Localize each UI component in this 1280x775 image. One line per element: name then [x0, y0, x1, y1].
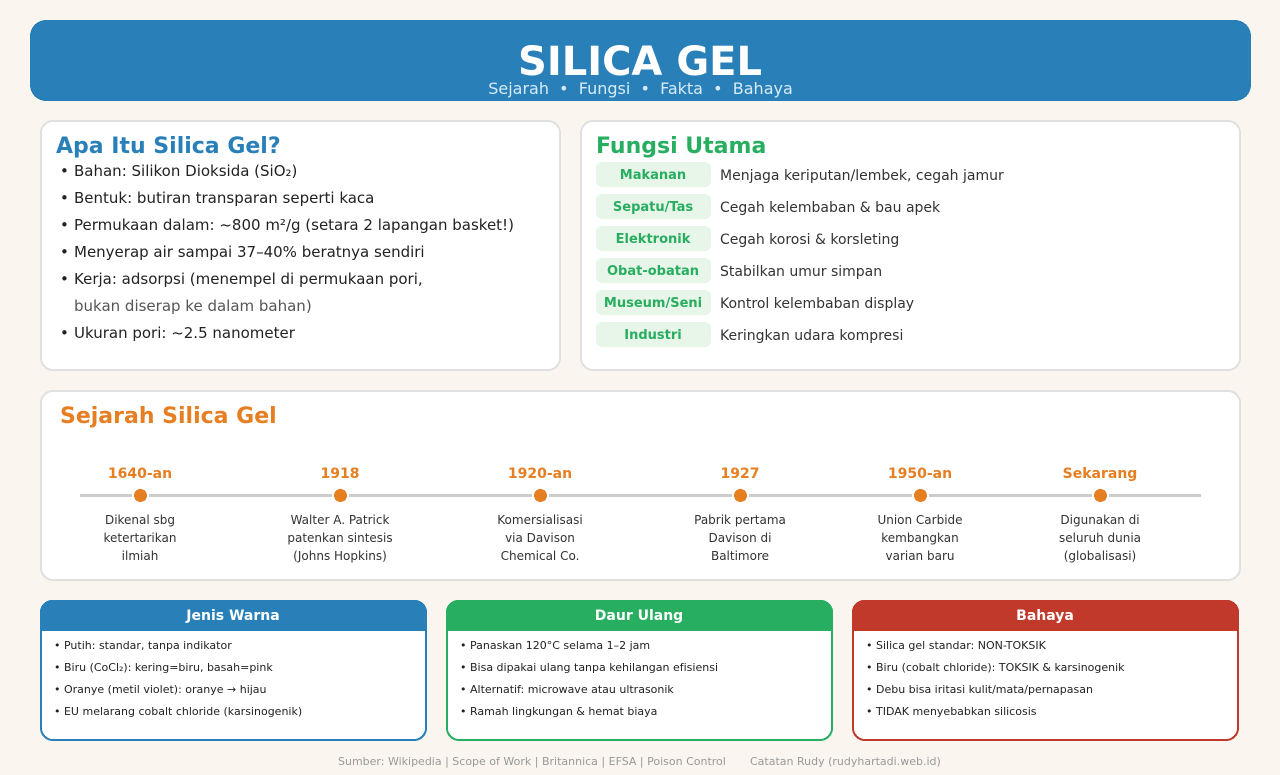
heading: Fungsi Utama: Fungsi Utama — [596, 134, 766, 159]
list: Daur Ulang: • Alternatif: microwave atau ultrasonik — [460, 683, 674, 696]
list: Bahaya: • Biru (cobalt chloride): TOKSIK & karsinogenik — [866, 661, 1125, 674]
milestone: 1918: (Johns Hopkins) — [293, 549, 387, 563]
list: Bahaya: • TIDAK menyebabkan silicosis — [866, 705, 1037, 718]
subtitle: Sejarah • Fungsi • Fakta • Bahaya — [488, 79, 793, 98]
heading: Apa Itu Silica Gel: Apa Itu Silica Gel? — [56, 134, 281, 159]
milestone: Sekarang: (globalisasi) — [1064, 549, 1136, 563]
card header: Jenis Warna — [40, 600, 427, 631]
row: Sepatu/Tas: Cegah kelembaban & bau apek — [720, 200, 941, 216]
card: Daur Ulang — [446, 600, 833, 740]
milestone: Sekarang: Digunakan di — [1060, 513, 1140, 527]
milestone: 1918 — [287, 466, 393, 563]
bullet list: Bahan: Silikon Dioksida (SiO₂) — [74, 162, 297, 180]
milestone: 1927: Pabrik pertama — [694, 513, 786, 527]
milestone: 1950-an: kembangkan — [881, 531, 959, 545]
bullet list: Menyerap air sampai 37–40% beratnya sendiri — [74, 243, 425, 261]
row: Sepatu/Tas — [596, 194, 941, 219]
bullet list: Kerja: adsorpsi (menempel di permukaan pori, — [74, 270, 423, 288]
list: Jenis Warna — [54, 639, 302, 718]
bullet list: • — [60, 243, 69, 261]
row: Industri: Keringkan udara kompresi — [720, 328, 903, 344]
milestone: 1640-an: Dikenal sbg — [105, 513, 175, 527]
row: Museum/Seni: Museum/Seni — [604, 296, 702, 311]
row: Industri: Industri — [624, 328, 682, 343]
row: Museum/Seni: Kontrol kelembaban display — [720, 296, 914, 312]
list: Daur Ulang: • Panaskan 120°C selama 1–2 jam — [460, 639, 650, 652]
list: Daur Ulang: • Bisa dipakai ulang tanpa kehilangan efisiensi — [460, 661, 718, 674]
milestone: 1950-an: Union Carbide — [877, 513, 963, 527]
list: Bahaya: • Silica gel standar: NON-TOKSIK — [866, 639, 1047, 652]
card: Jenis Warna — [40, 600, 427, 740]
row: Sepatu/Tas: Sepatu/Tas — [613, 200, 693, 215]
list: Daur Ulang: • Ramah lingkungan & hemat biaya — [460, 705, 657, 718]
footer sources: Sumber: Wikipedia | Scope of Work | Britannica | EFSA | Poison Control — [338, 755, 726, 768]
row: Obat-obatan: Obat-obatan — [607, 264, 699, 279]
milestone: 1927 — [694, 466, 786, 563]
card header: Daur Ulang — [446, 600, 833, 631]
milestone: 1918: patenkan sintesis — [287, 531, 393, 545]
list: Bahaya — [866, 639, 1125, 718]
row: Museum/Seni — [596, 290, 914, 315]
row: Makanan: Makanan — [620, 168, 686, 183]
milestone: 1920-an — [497, 466, 583, 563]
milestone: 1640-an — [104, 466, 176, 563]
milestone: 1640-an: ilmiah — [122, 549, 158, 563]
bullet list: • — [60, 270, 69, 288]
panel: Sejarah Silica Gel — [41, 391, 1240, 580]
row: Industri — [596, 322, 903, 347]
milestone: 1920-an: Komersialisasi — [497, 513, 583, 527]
bullet list: Bentuk: butiran transparan seperti kaca — [74, 189, 374, 207]
milestone: 1920-an: 1920-an — [508, 466, 572, 482]
list: Jenis Warna: • Oranye (metil violet): oranye → hijau — [54, 683, 267, 696]
list: Jenis Warna: • Putih: standar, tanpa indikator — [54, 639, 232, 652]
milestone: Sekarang — [1059, 466, 1141, 563]
title: SILICA GEL — [518, 39, 762, 85]
timeline axis — [80, 494, 1201, 497]
bullet list: bukan diserap ke dalam bahan) — [74, 297, 312, 315]
list: Daur Ulang — [460, 639, 718, 718]
milestone: 1920-an: via Davison — [505, 531, 575, 545]
header banner — [30, 20, 1251, 101]
bullet list: Permukaan dalam: ~800 m²/g (setara 2 lapangan basket!) — [74, 216, 514, 234]
footer sources: Catatan Rudy (rudyhartadi.web.id) — [750, 755, 941, 768]
row: Elektronik: Cegah korosi & korsleting — [720, 232, 899, 248]
card: Jenis Warna: Jenis Warna — [185, 608, 280, 624]
milestone: 1927: 1927 — [721, 466, 759, 482]
milestone: Sekarang: Sekarang — [1063, 466, 1137, 482]
milestone: 1918: Walter A. Patrick — [291, 513, 389, 527]
row: Elektronik — [596, 226, 899, 251]
list: Bahaya: • Debu bisa iritasi kulit/mata/pernapasan — [866, 683, 1093, 696]
card header: Bahaya — [852, 600, 1239, 631]
row: Obat-obatan — [596, 258, 882, 283]
bullet list: • — [60, 189, 69, 207]
row: Obat-obatan: Stabilkan umur simpan — [720, 264, 882, 280]
milestone: 1640-an: ketertarikan — [104, 531, 176, 545]
heading: Sejarah: Sejarah Silica Gel — [60, 404, 277, 429]
milestone: 1918: 1918 — [321, 466, 359, 482]
panel: Apa Itu Silica Gel — [41, 121, 560, 370]
milestone: 1640-an: 1640-an — [108, 466, 172, 482]
footer sources — [338, 755, 941, 768]
bullet list: • — [60, 162, 69, 180]
card: Daur Ulang: Daur Ulang — [595, 608, 683, 624]
panel: Fungsi Utama — [581, 121, 1240, 370]
bullet list — [60, 162, 514, 342]
milestone: 1950-an: varian baru — [885, 549, 955, 563]
row: Elektronik: Elektronik — [616, 232, 691, 247]
milestone: Sekarang: seluruh dunia — [1059, 531, 1141, 545]
bullet list: Ukuran pori: ~2.5 nanometer — [74, 324, 296, 342]
row: Makanan: Menjaga keriputan/lembek, cegah jamur — [720, 168, 1004, 184]
list: Jenis Warna: • EU melarang cobalt chloride (karsinogenik) — [54, 705, 302, 718]
bullet list: • — [60, 324, 69, 342]
milestone: 1950-an: 1950-an — [888, 466, 952, 482]
bullet list: • — [60, 216, 69, 234]
milestone: 1920-an: Chemical Co. — [501, 549, 579, 563]
milestone: 1950-an — [877, 466, 963, 563]
milestone: 1927: Davison di — [708, 531, 772, 545]
card: Bahaya — [852, 600, 1239, 740]
milestone: 1927: Baltimore — [711, 549, 769, 563]
card: Bahaya: Bahaya — [1016, 608, 1074, 624]
list: Jenis Warna: • Biru (CoCl₂): kering=biru, basah=pink — [54, 661, 273, 674]
row: Makanan — [596, 162, 1004, 187]
